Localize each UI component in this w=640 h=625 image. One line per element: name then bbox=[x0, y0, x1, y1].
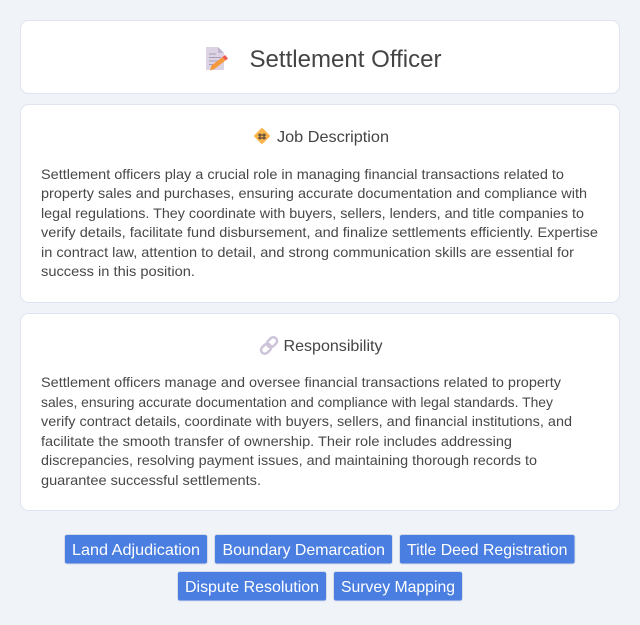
text block: job description: success in this position. bbox=[41, 263, 195, 279]
text block: job description: in contract law, attention to detail, and strong communication skills are essential for bbox=[41, 244, 574, 260]
tag: land adjudication: Land Adjudication bbox=[72, 542, 200, 559]
icon: link bbox=[259, 336, 279, 355]
tag: survey mapping: Survey Mapping bbox=[341, 579, 455, 596]
tag: dispute resolution bbox=[178, 572, 326, 601]
tag: boundary demarcation bbox=[214, 534, 392, 564]
tag: boundary demarcation: Boundary Demarcation bbox=[222, 542, 385, 559]
heading: job description: Job Description bbox=[277, 129, 389, 146]
text block: responsibility: sales, ensuring accurate documentation and compliance with legal standards. They bbox=[41, 394, 553, 410]
heading: responsibility: Responsibility bbox=[284, 338, 382, 355]
title: Settlement Officer bbox=[250, 46, 442, 73]
text block: job description: Settlement officers play a crucial role in managing financial transactions related to bbox=[41, 166, 564, 182]
tags bbox=[64, 534, 575, 601]
text block: responsibility: discrepancies, resolving payment issues, and maintaining thorough records to bbox=[41, 452, 537, 468]
text block: job description: verify details, facilitate fund disbursement, and finalize settlements efficiently. Expertise bbox=[41, 224, 598, 240]
text block: responsibility: Settlement officers manage and oversee financial transactions related to property bbox=[41, 374, 561, 390]
tag: land adjudication bbox=[64, 534, 208, 564]
text block: job description: property sales and purchases, ensuring accurate documentation and compliance with bbox=[41, 185, 587, 201]
tag: title deed registration: Title Deed Registration bbox=[407, 542, 568, 559]
panel: responsibility bbox=[20, 314, 620, 510]
text block: job description bbox=[41, 166, 598, 279]
text block: responsibility bbox=[41, 374, 572, 488]
text block: responsibility: guarantee successful settlements. bbox=[41, 472, 261, 488]
icon: job description diamond bbox=[254, 128, 270, 144]
text block: responsibility: facilitate the smooth transfer of ownership. Their role includes addressing bbox=[41, 433, 512, 449]
tag: title deed registration bbox=[400, 534, 575, 564]
text block: responsibility: verify contract details, coordinate with buyers, sellers, and financial institutions, and bbox=[41, 413, 572, 429]
tag: dispute resolution: Dispute Resolution bbox=[185, 579, 319, 596]
text block: job description: legal regulations. They coordinate with buyers, sellers, lenders, and title companies to bbox=[41, 205, 584, 221]
icon: memo with pencil bbox=[206, 47, 228, 70]
panel: header bbox=[20, 20, 620, 94]
panel: job description bbox=[20, 104, 620, 302]
tag: survey mapping bbox=[334, 572, 462, 601]
